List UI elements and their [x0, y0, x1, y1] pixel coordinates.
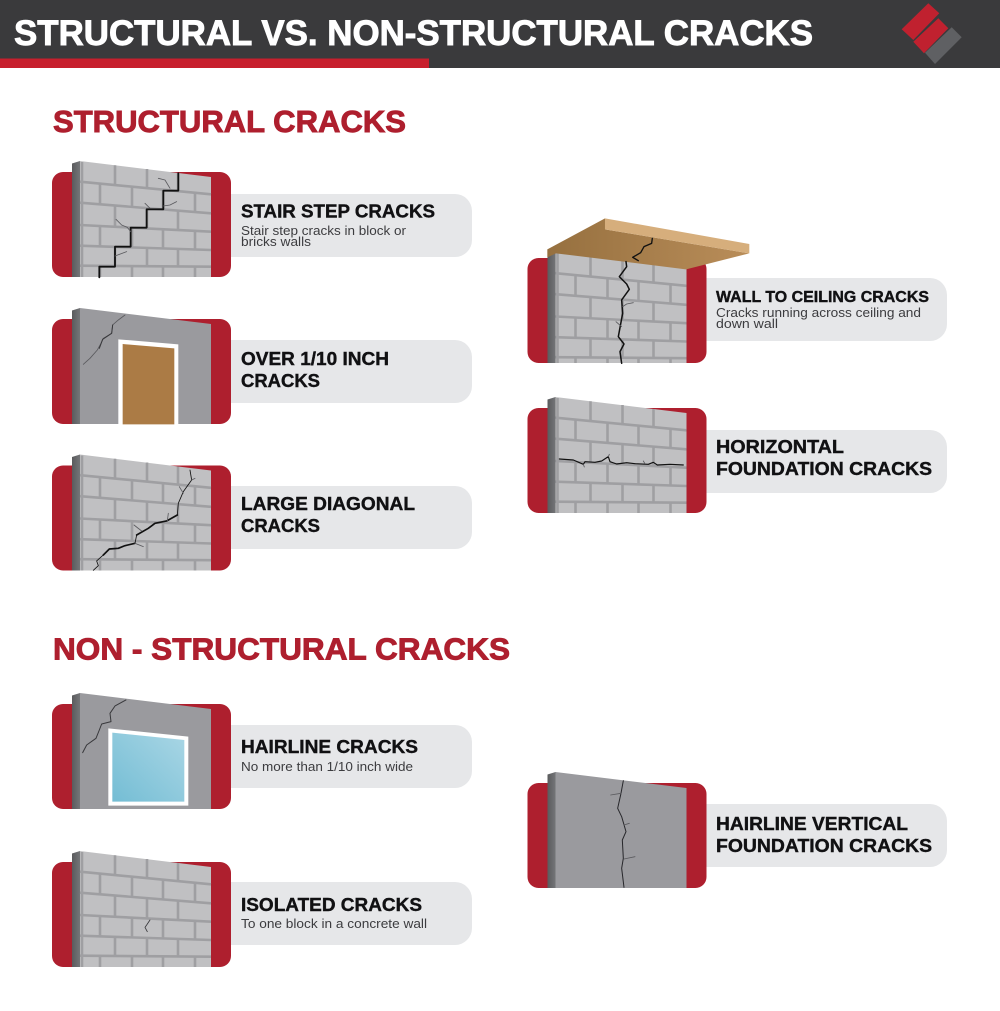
red accent bar	[0, 58, 429, 68]
label text: HAIRLINE VERTICAL	[716, 814, 908, 834]
heading: non-structural cracks: NON - STRUCTURAL CRACKS	[53, 632, 510, 666]
label pill	[700, 430, 947, 493]
label pill	[225, 194, 472, 257]
icon: brick wall with isolated crack	[52, 851, 231, 967]
title: STRUCTURAL VS. NON-STRUCTURAL CRACKS	[14, 14, 813, 53]
label text line two: CRACKS	[241, 516, 320, 536]
item: hairline vertical foundation cracks	[528, 772, 947, 888]
logo	[902, 3, 962, 64]
item: horizontal foundation cracks	[528, 397, 947, 513]
label text: HAIRLINE CRACKS	[241, 737, 418, 757]
header bar	[0, 0, 1000, 68]
item: hairline cracks	[52, 693, 472, 809]
label pill	[225, 882, 472, 945]
label text line two: CRACKS	[241, 371, 320, 391]
label pill	[225, 340, 472, 403]
label text: HORIZONTAL	[716, 437, 844, 457]
description: To one block in a concrete wall	[241, 917, 427, 931]
icon: brick wall with diagonal crack	[52, 454, 231, 570]
description: bricks walls	[241, 235, 311, 249]
icon: brick wall with ceiling and crack	[528, 218, 749, 368]
item: over 1/10 inch cracks	[52, 308, 472, 424]
label text: OVER 1/10 INCH	[241, 349, 389, 369]
label text: WALL TO CEILING CRACKS	[716, 289, 929, 306]
heading: structural cracks: STRUCTURAL CRACKS	[53, 104, 406, 139]
label text line two: FOUNDATION CRACKS	[716, 459, 932, 479]
label pill	[225, 486, 472, 549]
label text: STAIR STEP CRACKS	[241, 202, 435, 222]
label text line two: FOUNDATION CRACKS	[716, 836, 932, 856]
icon: concrete wall with window and crack	[52, 693, 231, 809]
icon: brick wall with horizontal crack	[528, 397, 706, 513]
description: Stair step cracks in block or	[241, 224, 406, 238]
label text: LARGE DIAGONAL	[241, 494, 415, 514]
icon: concrete wall with vertical crack	[528, 772, 706, 888]
icon: concrete wall with door and crack	[52, 308, 231, 424]
label pill	[700, 278, 947, 341]
item: isolated cracks	[52, 851, 472, 967]
label pill	[225, 725, 472, 788]
item: wall to ceiling cracks	[528, 218, 947, 368]
description: Cracks running across ceiling and	[716, 306, 921, 320]
icon: brick wall with stair step crack	[52, 161, 231, 277]
description: No more than 1/10 inch wide	[241, 760, 413, 774]
label pill	[700, 804, 947, 867]
label text: ISOLATED CRACKS	[241, 895, 422, 915]
item: stair step cracks	[52, 161, 472, 277]
item: large diagonal cracks	[52, 454, 472, 570]
description: down wall	[716, 317, 778, 331]
